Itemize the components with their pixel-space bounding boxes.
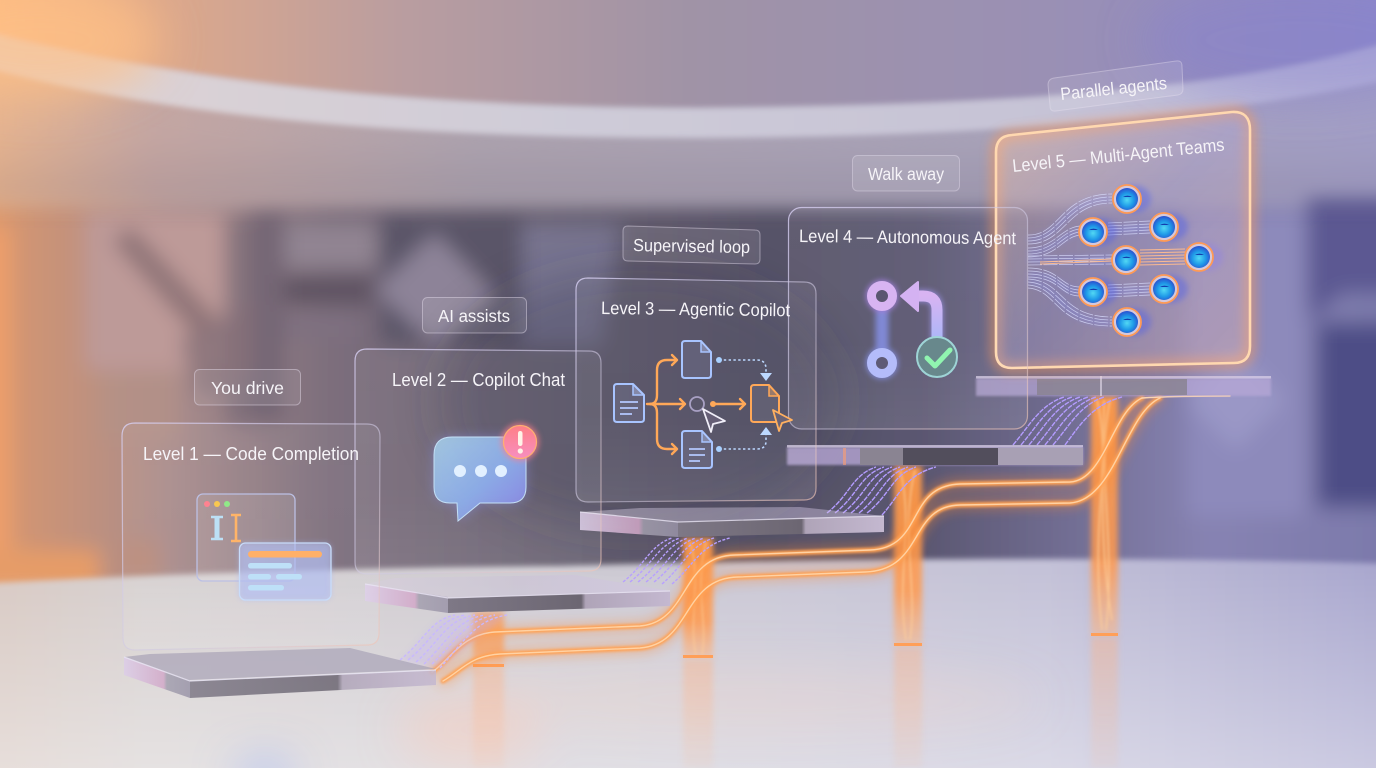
chip: AI assists (422, 298, 526, 333)
agent node (1113, 308, 1151, 336)
agent node (1079, 218, 1117, 246)
heading: level 3: Level 3 — Agentic Copilot (601, 298, 790, 320)
panel: level 1 code completion (122, 423, 380, 650)
agent node (1113, 185, 1151, 213)
level 3 support pillar (683, 538, 713, 658)
platform: level 1 (124, 648, 436, 698)
level 2 support pillar (473, 612, 504, 667)
platform: level 5 (976, 376, 1271, 396)
level 5 support pillar (1091, 396, 1118, 636)
chip: you drive (194, 370, 300, 405)
heading: level 2: Level 2 — Copilot Chat (392, 370, 565, 390)
icon: code editor with autocomplete (197, 494, 331, 600)
heading: level 5: Level 5 — Multi-Agent Teams (1011, 135, 1225, 176)
document icons (614, 341, 712, 468)
agent node (1079, 278, 1117, 306)
chip: supervised loop: Supervised loop (633, 235, 750, 257)
floor reflections of pillars (473, 638, 1118, 768)
chip: supervised loop (623, 226, 760, 264)
icon: chat bubble with alert (434, 423, 539, 521)
chip: parallel agents: Parallel agents (1059, 73, 1168, 104)
chip: walk away: Walk away (868, 164, 944, 184)
orange energy path: upper and lower lines (432, 396, 1230, 681)
chip: you drive: You drive (211, 378, 284, 398)
chip: parallel agents (1048, 61, 1183, 111)
agent node (1150, 213, 1188, 241)
heading: level 4: Level 4 — Autonomous Agent (799, 226, 1016, 248)
streams into agents (1028, 199, 1150, 323)
agent node (1185, 243, 1223, 271)
purple data stream: level 3 to level 4 (827, 467, 936, 515)
level 4 support pillar (894, 466, 922, 646)
platform: level 2 (365, 575, 670, 613)
purple data stream: level 4 to level 5 (1013, 397, 1122, 445)
chip: walk away (852, 156, 960, 191)
heading: level 1: Level 1 — Code Completion (143, 444, 359, 464)
dashed loop arrows (719, 360, 766, 449)
purple data stream: level 1 to level 2 (400, 615, 507, 668)
purple data stream: level 2 to level 3 (623, 538, 730, 584)
panel: level 4 autonomous agent (788, 208, 1028, 429)
agent node (1112, 246, 1140, 274)
chip: AI assists: AI assists (438, 306, 510, 326)
orange branches (647, 355, 745, 454)
agent node (1150, 275, 1188, 303)
platform: level 4 (787, 445, 1083, 465)
icon: workflow diagram (614, 341, 792, 468)
panel: level 3 agentic copilot (576, 278, 816, 502)
panel: level 2 copilot chat (355, 349, 601, 574)
platform: level 3 (580, 507, 884, 537)
icon: pull request merged (866, 280, 957, 379)
panel: level 5 multi-agent teams (996, 112, 1250, 368)
